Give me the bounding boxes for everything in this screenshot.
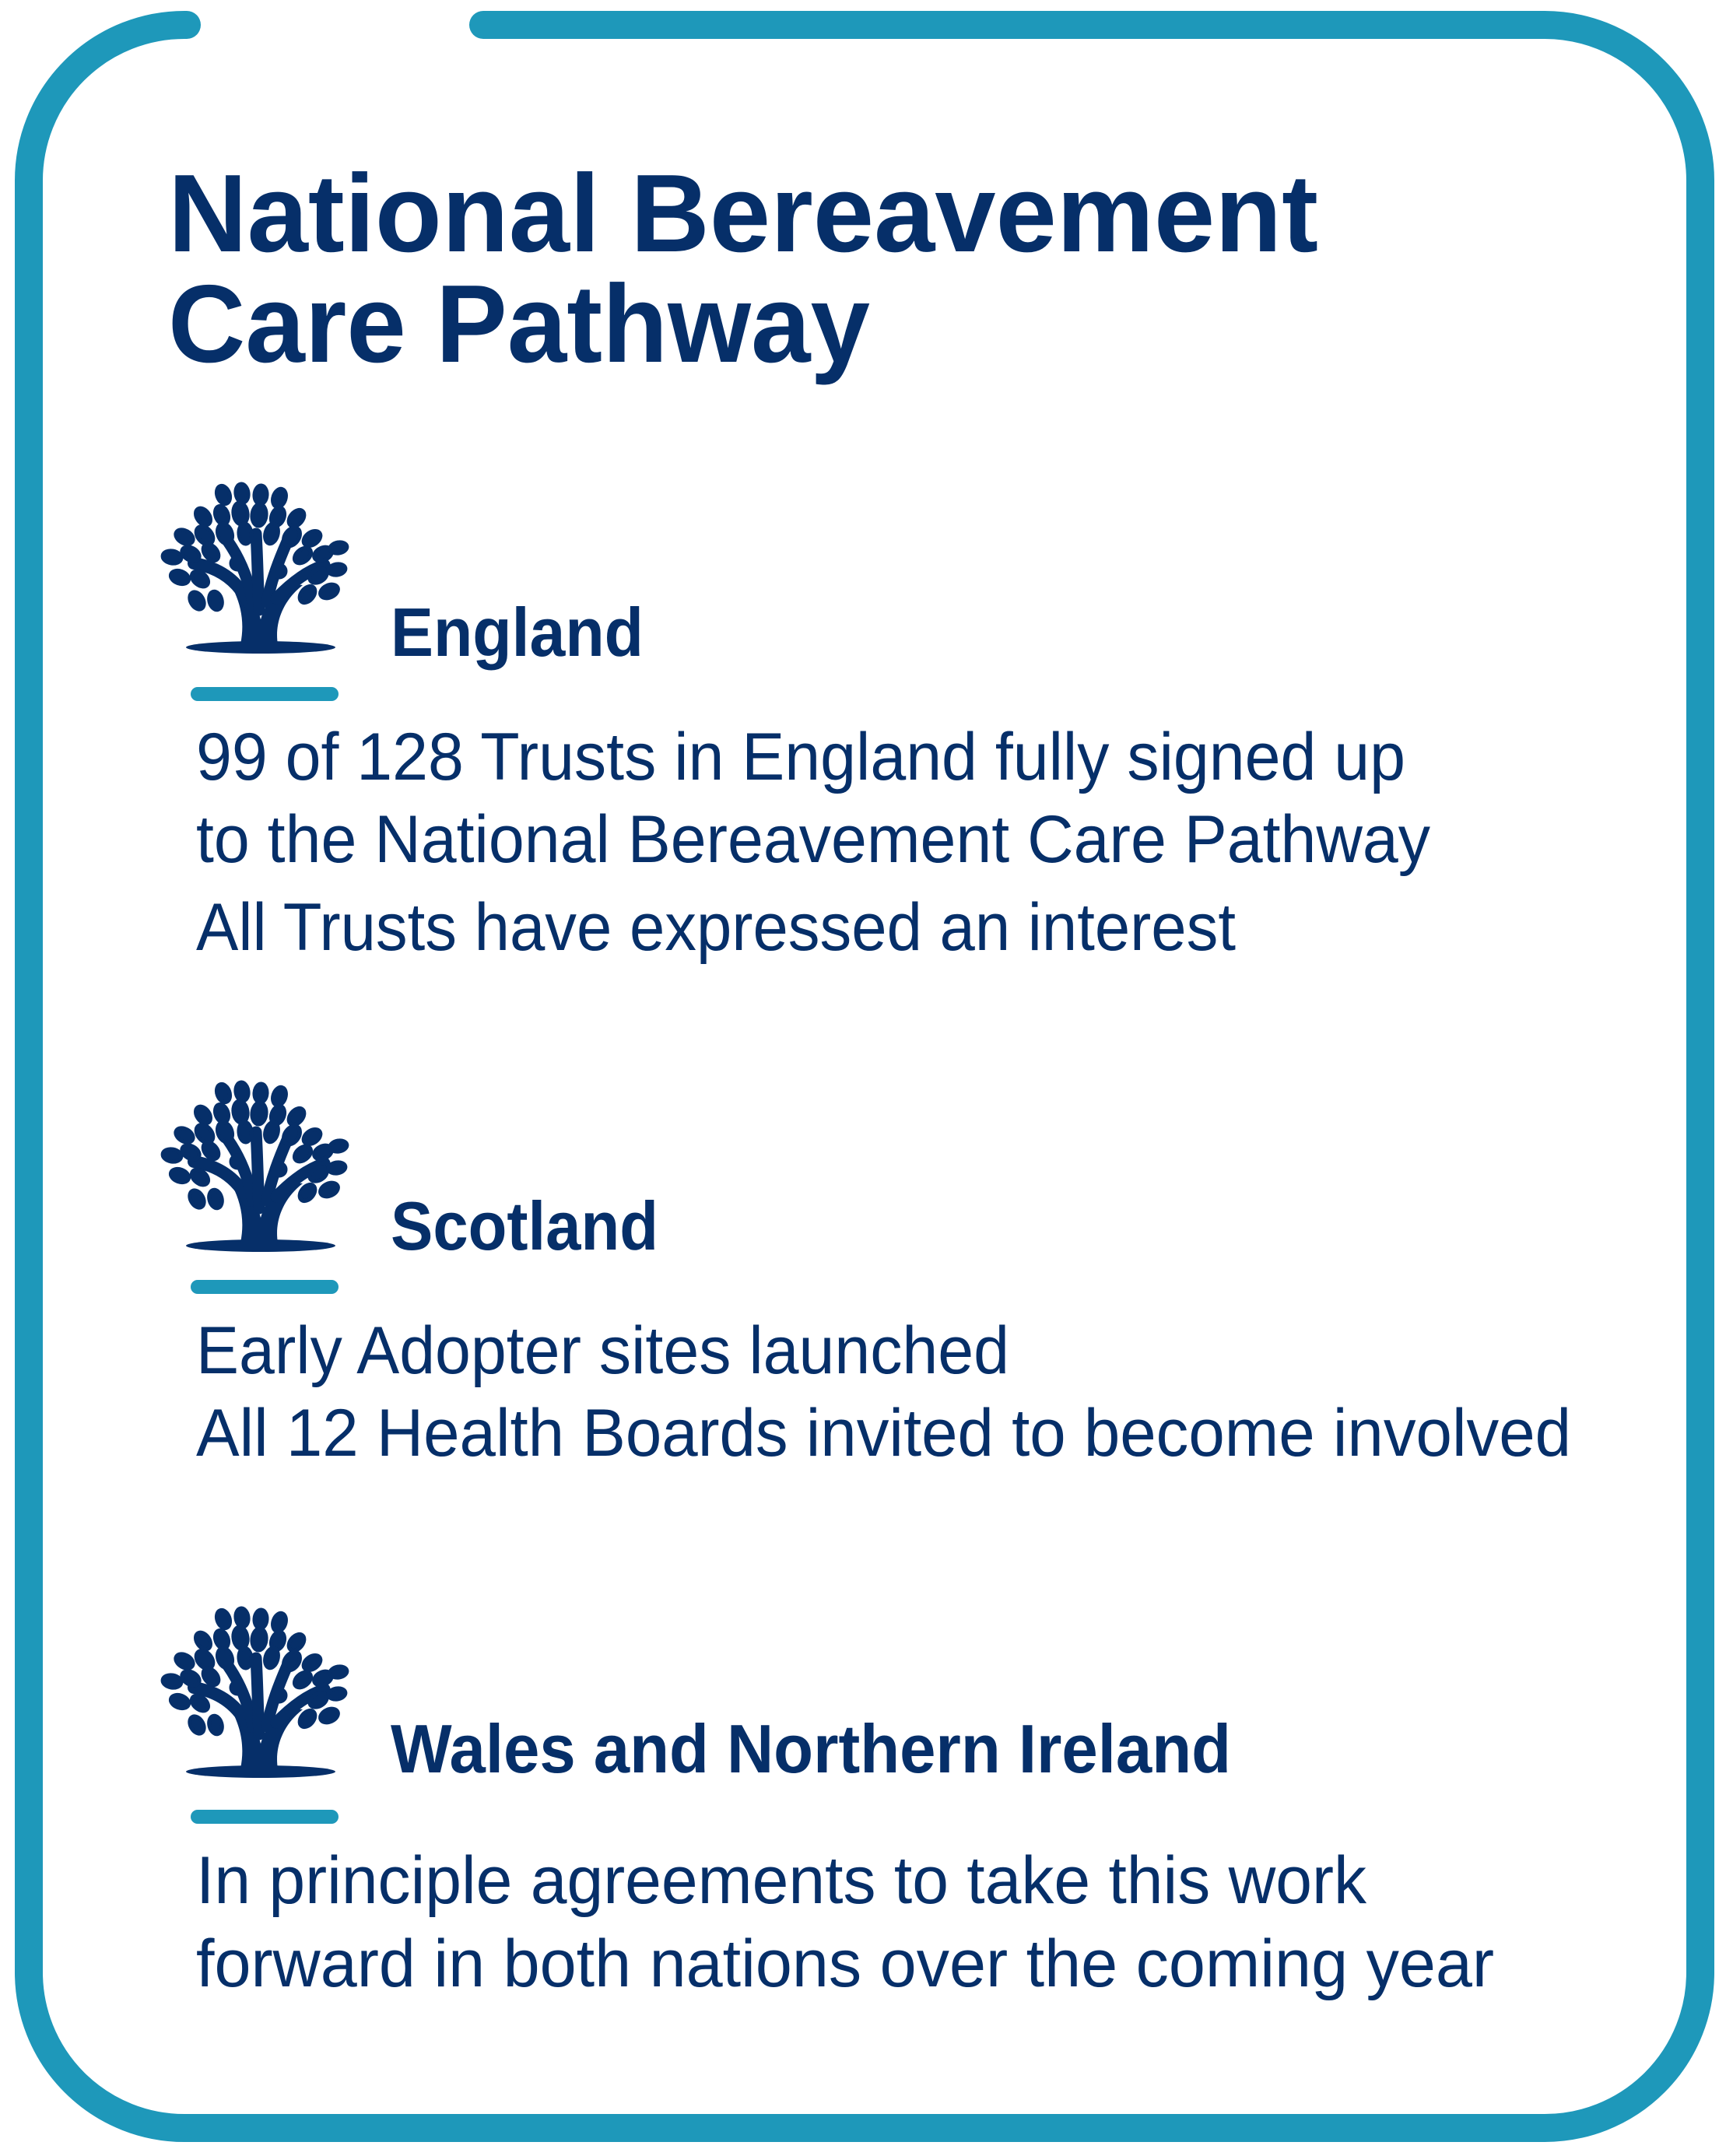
icon: tree Wales	[162, 1607, 348, 1778]
text: England details: 99 of 128 Trusts in England fully signed up	[196, 720, 1405, 794]
title: Care Pathway	[168, 262, 870, 386]
text: Scotland details	[196, 1313, 1571, 1471]
panel: Wales and Northern Ireland	[162, 1607, 1494, 2001]
heading: Wales and Northern Ireland: Wales and Northern Ireland	[391, 1710, 1231, 1787]
text: Wales details: forward in both nations over the coming year	[196, 1926, 1494, 2001]
text: Wales details: In principle agreements to take this work	[196, 1843, 1367, 1918]
icon: tree Scotland	[162, 1082, 348, 1252]
text: England details	[196, 720, 1430, 965]
panel: Scotland	[162, 1082, 1571, 1471]
text: England details: All Trusts have expressed an interest	[196, 890, 1236, 965]
title: National Bereavement	[168, 152, 1318, 275]
teal underline bar	[191, 1810, 339, 1824]
heading: England: England	[391, 594, 644, 671]
text: Wales details	[196, 1843, 1494, 2001]
teal underline bar	[191, 1280, 339, 1294]
icon: tree England	[162, 483, 348, 654]
panel: England	[162, 483, 1430, 965]
text: Scotland details: All 12 Health Boards invited to become involved	[196, 1396, 1571, 1471]
text: Scotland details: Early Adopter sites launched	[196, 1313, 1009, 1388]
teal underline bar	[191, 687, 339, 701]
text: England details: to the National Bereavement Care Pathway	[196, 802, 1430, 877]
title	[168, 152, 1318, 386]
heading: Scotland: Scotland	[391, 1187, 658, 1264]
